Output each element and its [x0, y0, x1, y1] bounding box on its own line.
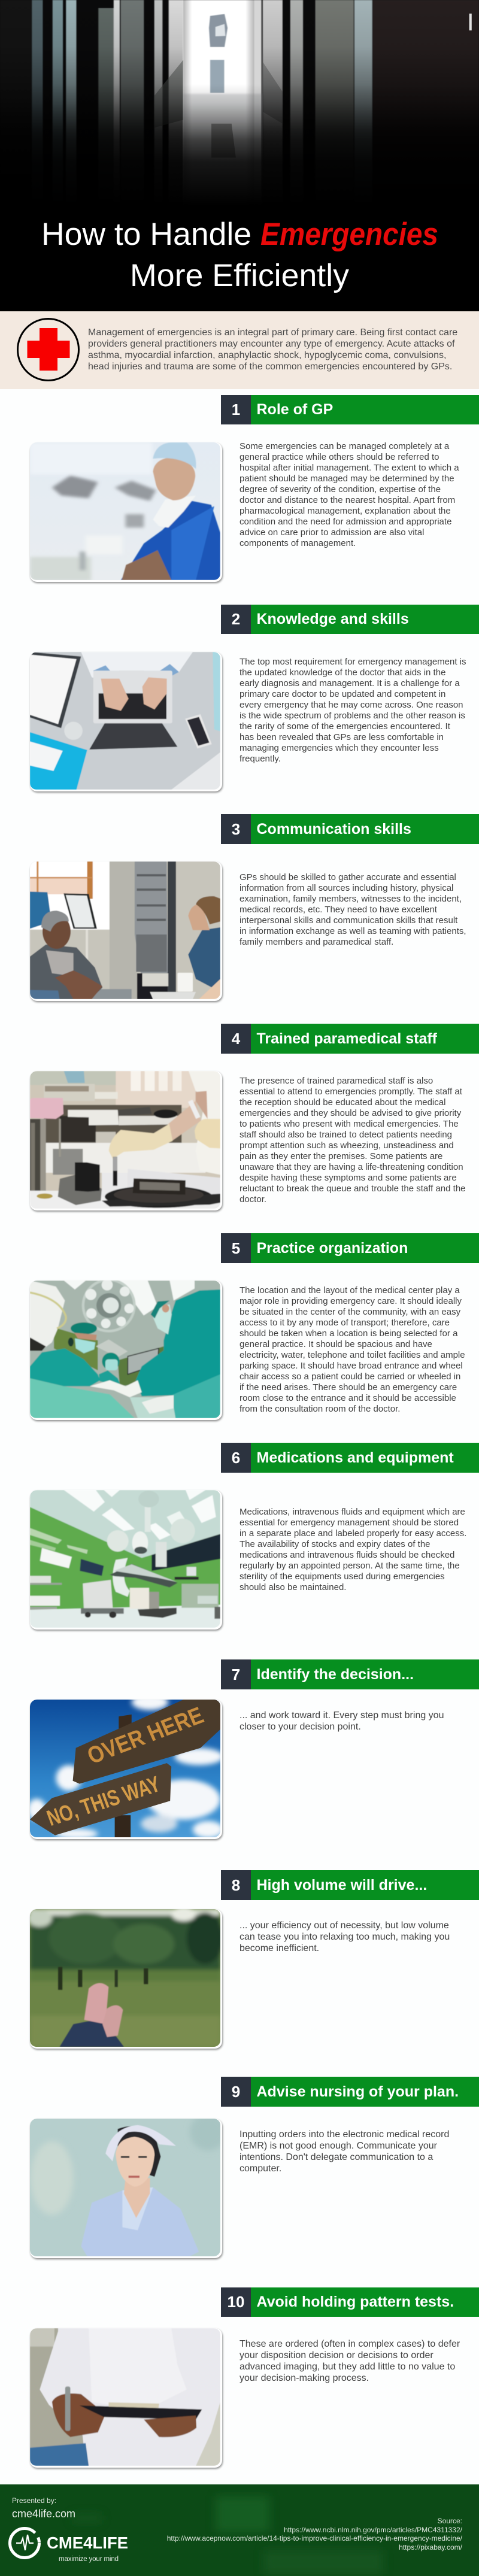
text: practice organization: chair access so a patient could be carried or wheeled in: [240, 1372, 460, 1382]
text: medications and equipment: The availability of stocks and expiry dates of the: [240, 1539, 431, 1549]
heading 2: 2: [232, 610, 240, 628]
footer: [0, 2484, 479, 2576]
logo: CME4LIFE: maximize your mind: [59, 2556, 119, 2563]
text: medications and equipment: sterility of the equipments used during emergencies: [240, 1571, 445, 1582]
heading 1: 1: [232, 400, 240, 418]
text: medications and equipment: should also be maintained.: [240, 1582, 346, 1592]
text: identify the decision: [240, 1710, 444, 1732]
heading 4: [221, 1024, 479, 1054]
text: role of GP: doctor and distance to the nearest hospital. Apart from: [240, 495, 455, 505]
photo: crossed feet on a grassy field: [30, 1909, 222, 2049]
section 5: practice organization: [29, 1233, 479, 1422]
text: communication skills: [240, 872, 466, 947]
hero photo: foggy hospital corridor: [0, 0, 479, 311]
text: knowledge and skills: [240, 657, 466, 764]
heading 7: Identify the decision...: [256, 1665, 414, 1682]
heading 5: 5: [232, 1239, 240, 1257]
heading 6: [221, 1443, 479, 1473]
section 9: advise nursing: [29, 2077, 479, 2261]
text: knowledge and skills: is the wide spectrum of problems and the other reason is: [240, 711, 465, 721]
text: role of GP: general practice while others should be referred to: [240, 452, 439, 462]
heading 9: 9: [232, 2082, 240, 2100]
title: [41, 217, 438, 293]
title: Emergencies: [260, 217, 438, 252]
text: practice organization: if the need arises. There should be an emergency care: [240, 1382, 457, 1392]
intro text: head injuries and trauma are some of the common emergencies encountered by GPs.: [88, 362, 452, 372]
text: communication skills: medical records, etc. They need to have excellent: [240, 905, 437, 915]
photo: lab technician with test tube: [30, 1071, 222, 1210]
presented by: Presented by:: [12, 2496, 56, 2505]
text: knowledge and skills: The top most requirement for emergency management is: [240, 657, 466, 667]
text: trained paramedical staff: essential to attend to emergencies promptly. The staff at: [240, 1087, 462, 1097]
heading 8: High volume will drive...: [256, 1876, 427, 1893]
photo: doctor holding clipboard: [30, 2328, 222, 2468]
heading 7: [221, 1659, 479, 1689]
text: trained paramedical staff: reluctant to break the queue and trouble the staff and the: [240, 1184, 466, 1194]
title: How to Handle: [41, 217, 251, 252]
text: role of GP: pharmacological management, explanation about the: [240, 506, 451, 516]
section 3: communication skills: [29, 814, 479, 1003]
text: medications and equipment: regularly by an appointed person. At the same time, the: [240, 1561, 460, 1571]
text: medications and equipment: essential for emergency management should be stored: [240, 1518, 459, 1528]
sources: http://www.acepnow.com/article/14-tips-to-improve-clinical-efficiency-in-emergency-medicine/: [167, 2534, 462, 2542]
heading 10: [221, 2287, 479, 2317]
heading 8: [221, 1870, 479, 1900]
intro text: Management of emergencies is an integral part of primary care. Being first contact care: [88, 327, 457, 338]
text: knowledge and skills: primary care doctor to be updated and competent in: [240, 689, 445, 699]
section 2: knowledge and skills: [29, 605, 479, 794]
heading 4: Trained paramedical staff: [256, 1030, 437, 1046]
section 10: avoid holding pattern tests: [29, 2287, 479, 2470]
text: practice organization: general practice. It should be spacious and have: [240, 1339, 432, 1349]
section 1: role of GP: [29, 395, 479, 584]
photo: surgeons in operating room: [30, 1281, 222, 1420]
photo: doctor talking with patient: [30, 861, 222, 1001]
text: practice organization: from the consultation room of the doctor.: [240, 1404, 400, 1414]
heading 9: Advise nursing of your plan.: [256, 2083, 459, 2100]
logo: CME4LIFE: [8, 2527, 128, 2563]
heading 3: Communication skills: [256, 820, 411, 837]
text: knowledge and skills: early diagnosis and management. It is a challenge for a: [240, 678, 460, 688]
text: identify the decision: closer to your decision point.: [240, 1722, 361, 1732]
heading 1: [221, 395, 479, 424]
text: communication skills: information from all sources including history, physical: [240, 883, 453, 893]
text: trained paramedical staff: emergencies and they should be advised to give priority: [240, 1108, 461, 1118]
photo: green operating theatre: [30, 1490, 222, 1630]
text: role of GP: [240, 441, 459, 548]
heading 1: Role of GP: [256, 401, 333, 418]
text: practice organization: access to it by any mode of transport; therefore, care: [240, 1318, 450, 1328]
photo: wooden signpost: NO, THIS WAY: [44, 1771, 163, 1831]
heading 5: [221, 1233, 479, 1263]
text: advise nursing: Inputting orders into the electronic medical record: [240, 2129, 449, 2140]
text: practice organization: [240, 1285, 465, 1414]
logo: CME4LIFE: CME4LIFE: [47, 2533, 128, 2552]
heading 2: Knowledge and skills: [256, 611, 409, 627]
text: trained paramedical staff: pain as they enter the premises. Some patients are: [240, 1151, 442, 1161]
text: practice organization: The location and the layout of the medical center play a: [240, 1285, 460, 1295]
text: knowledge and skills: the rarity of some of the emergencies encountered. It: [240, 721, 450, 732]
text: knowledge and skills: has been revealed that GPs are less comfortable in: [240, 732, 444, 742]
text: trained paramedical staff: despite having these symptoms and some patients are: [240, 1173, 457, 1183]
text: practice organization: parking space. It should have broad entrance and wheel: [240, 1361, 463, 1371]
heading 2: [221, 605, 479, 634]
intro text: asthma, myocardial infarction, anaphylactic shock, hypoglycemic coma, convulsions,: [88, 350, 447, 360]
heading 6: Medications and equipment: [256, 1449, 454, 1466]
heading 6: 6: [232, 1449, 240, 1467]
text: avoid holding pattern tests: These are ordered (often in complex cases) to defer: [240, 2339, 460, 2349]
text: high volume: [240, 1920, 450, 1953]
text: communication skills: GPs should be skilled to gather accurate and essential: [240, 872, 456, 882]
heading 3: [221, 814, 479, 844]
text: practice organization: electricity, water, telephone and toilet facilities and ample: [240, 1350, 465, 1360]
text: avoid holding pattern tests: advanced imaging, but they add little to no value to: [240, 2362, 455, 2372]
text: medications and equipment: in a separate place and labeled properly for easy access.: [240, 1528, 466, 1539]
text: role of GP: condition and the need for admission and appropriate: [240, 517, 451, 527]
icon: red cross in circle: [17, 318, 80, 381]
text: role of GP: components of management.: [240, 538, 356, 548]
text: high volume: can tease you into relaxing too much, making you: [240, 1932, 450, 1942]
heading 7: 7: [232, 1665, 240, 1683]
text: trained paramedical staff: the reception should be educated about the medical: [240, 1097, 445, 1108]
text: role of GP: Some emergencies can be managed completely at a: [240, 441, 449, 451]
photo: smiling nurse: [30, 2119, 222, 2258]
text: communication skills: examination, family members, witnesses to the incident,: [240, 894, 462, 904]
text: practice organization: major role in providing emergency care. It should ideally: [240, 1296, 462, 1306]
text: knowledge and skills: the updated knowledge of the doctor that aids in the: [240, 667, 445, 678]
sources: https://pixabay.com/: [399, 2543, 462, 2551]
text: trained paramedical staff: staff should also be trained to detect patients needing: [240, 1130, 452, 1140]
text: trained paramedical staff: unaware that they are having a life-threatening condition: [240, 1162, 463, 1172]
text: medications and equipment: medications and intravenous fluids should be checked: [240, 1550, 454, 1560]
heading 10: Avoid holding pattern tests.: [256, 2293, 454, 2310]
photo: wooden signpost: [30, 1700, 222, 1839]
text: medications and equipment: [240, 1507, 466, 1592]
text: advise nursing: intentions. Don't delegate communication to a: [240, 2152, 433, 2162]
sources: Source:: [438, 2517, 462, 2525]
intro text: providers general practitioners may encounter any type of emergency. Acute attacks of: [88, 339, 454, 349]
text: advise nursing: computer.: [240, 2164, 281, 2174]
footer background texture: [215, 2496, 380, 2571]
text: practice organization: room close to the entrance and it should be accessible: [240, 1393, 456, 1403]
text: trained paramedical staff: prompt attention such as wheezing, unsteadiness and: [240, 1140, 454, 1151]
photo: surgeon in blue scrubs: [30, 442, 222, 582]
text: high volume: become inefficient.: [240, 1943, 319, 1953]
text: knowledge and skills: managing emergencies which they encounter less: [240, 743, 439, 753]
text: practice organization: should be taken when a location is being selected for a: [240, 1328, 457, 1339]
text: role of GP: patient should be managed may be determined by the: [240, 474, 454, 484]
text: high volume: ... your efficiency out of necessity, but low volume: [240, 1920, 449, 1931]
text: trained paramedical staff: doctor.: [240, 1194, 266, 1204]
text: role of GP: hospital after initial management. The extent to which a: [240, 463, 459, 473]
text: medications and equipment: Medications, intravenous fluids and equipment which are: [240, 1507, 465, 1517]
heading 5: Practice organization: [256, 1239, 408, 1256]
photo: doctor typing on laptop: [30, 652, 222, 791]
text: knowledge and skills: every emergency that he may come across. One reason: [240, 700, 463, 710]
text: trained paramedical staff: The presence of trained paramedical staff is also: [240, 1076, 433, 1086]
text: advise nursing: [240, 2129, 449, 2174]
text: identify the decision: ... and work toward it. Every step must bring you: [240, 1710, 444, 1721]
sources: https://www.ncbi.nlm.nih.gov/pmc/articles/PMC4311332/: [284, 2525, 462, 2533]
text: practice organization: be situated in the center of the community, with an easy: [240, 1307, 460, 1317]
text: advise nursing: (EMR) is not good enough. Communicate your: [240, 2141, 437, 2151]
section 8: high volume: [29, 1870, 479, 2051]
panel: introduction: [0, 311, 479, 389]
text: communication skills: in information exchange as well as teaming with patients,: [240, 926, 466, 936]
text: trained paramedical staff: to patients who present with medical emergencies. The: [240, 1119, 459, 1129]
intro text: [88, 327, 457, 372]
text: communication skills: family members and paramedical staff.: [240, 937, 393, 947]
heading 9: [221, 2077, 479, 2107]
text: knowledge and skills: frequently.: [240, 754, 281, 764]
section 4: trained paramedical staff: [29, 1024, 479, 1213]
heading 10: 10: [228, 2293, 244, 2311]
heading 4: 4: [232, 1030, 240, 1048]
title: More Efficiently: [130, 258, 349, 293]
text: role of GP: degree of severity of the condition, expertise of the: [240, 484, 441, 494]
heading 8: 8: [232, 1876, 240, 1894]
text: avoid holding pattern tests: your disposition decision or decisions to order: [240, 2350, 433, 2360]
heading 3: 3: [232, 820, 240, 838]
text: avoid holding pattern tests: your decision-making process.: [240, 2373, 369, 2383]
text: communication skills: interpersonal skills and communication skills that result: [240, 915, 457, 926]
section 7: identify the decision: [29, 1659, 479, 1841]
sources: [167, 2517, 462, 2551]
text: trained paramedical staff: [240, 1076, 466, 1204]
section 6: medications and equipment: [29, 1443, 479, 1632]
text: role of GP: advice on care prior to admission are also vital: [240, 527, 424, 538]
website: cme4life.com: [12, 2508, 75, 2520]
text: avoid holding pattern tests: [240, 2339, 460, 2383]
